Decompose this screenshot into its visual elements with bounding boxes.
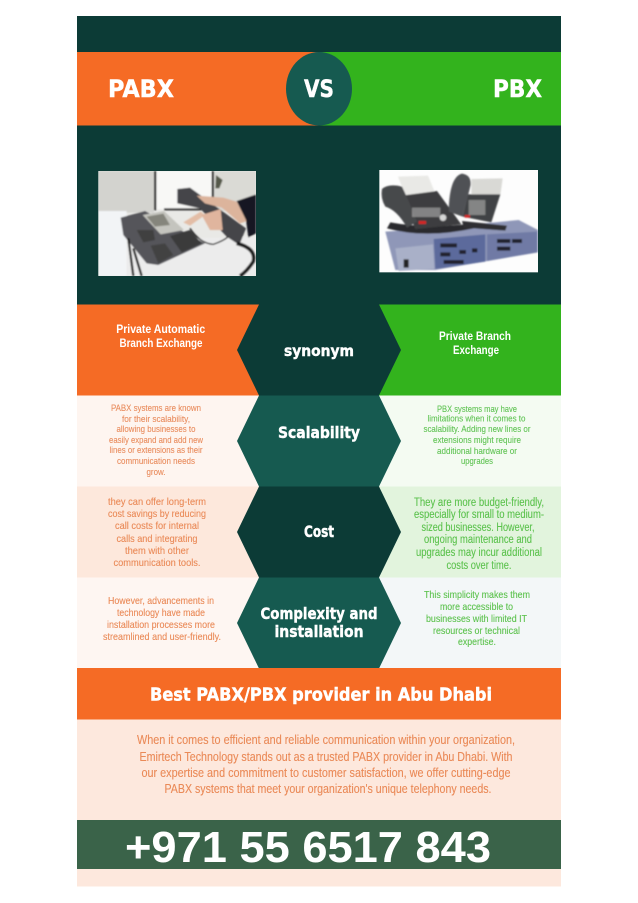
- PBX scalability text: additional hardware or: [437, 446, 517, 457]
- PABX cost text: they can offer long-term: [108, 496, 206, 508]
- PBX scalability text: [424, 404, 530, 467]
- PBX scalability text: scalability. Adding new lines or: [424, 424, 530, 435]
- phone number band: [77, 820, 561, 872]
- left cell: PABX synonym: Private Automatic: [116, 322, 205, 336]
- PBX scalability text: upgrades: [461, 456, 493, 467]
- PABX scalability text: for their scalability,: [122, 414, 190, 425]
- PABX scalability text: communication needs: [117, 456, 195, 467]
- heading: PBX: PBX: [493, 75, 542, 103]
- phone number band: +971 55 6517 843: [125, 823, 491, 872]
- PBX cost text: upgrades may incur additional: [416, 547, 542, 559]
- banner: best provider: Best PABX/PBX provider in Abu Dhabi: [150, 686, 492, 706]
- comparison banner: PABX vs PBX: [77, 52, 561, 126]
- PABX scalability text: [109, 403, 203, 478]
- hexagon: cost: Cost: [304, 522, 334, 541]
- PBX complexity text: more accessible to: [440, 601, 513, 613]
- hexagon: synonym: [237, 304, 401, 396]
- row: cost backgrounds and text: [77, 486, 561, 578]
- photo: hand holding desk phone handset: [98, 171, 256, 276]
- PABX complexity text: However, advancements in: [108, 595, 214, 607]
- PABX scalability text: easily expand and add new: [109, 435, 203, 446]
- right cell: PBX synonym: [319, 304, 561, 396]
- banner: best provider: [77, 668, 561, 720]
- PBX complexity text: resources or technical: [433, 625, 520, 637]
- PABX cost text: calls and integrating: [116, 533, 198, 545]
- PBX cost text: ongoing maintenance and: [424, 534, 532, 546]
- row: synonym: [77, 304, 561, 396]
- provider paragraph: our expertise and commitment to customer satisfaction, we offer cutting-edge: [142, 766, 511, 780]
- PABX cost text: cost savings by reducing: [108, 508, 206, 520]
- hexagon: synonym: synonym: [284, 342, 354, 360]
- left cell: PABX synonym: [77, 304, 319, 396]
- PABX complexity text: [103, 595, 221, 643]
- PBX cost text: costs over time.: [446, 560, 512, 572]
- row: scalability backgrounds and text: [77, 396, 561, 486]
- photo: PBX phones on server unit: [379, 170, 538, 272]
- PBX complexity text: expertise.: [458, 636, 496, 648]
- PBX cost text: sized businesses. However,: [422, 522, 534, 534]
- PBX scalability text: limitations when it comes to: [428, 414, 526, 424]
- hexagon: complexity and installation: [237, 578, 401, 668]
- vs badge: VS: [304, 75, 334, 103]
- PBX scalability text: PBX systems may have: [437, 404, 517, 415]
- PABX cost text: call costs for internal: [115, 520, 199, 532]
- hexagon: scalability: Scalability: [278, 423, 360, 442]
- PBX cost text: [414, 497, 544, 572]
- PABX cost text: them with other: [125, 545, 189, 557]
- PBX complexity text: This simplicity makes them: [424, 589, 530, 601]
- vs badge: [286, 52, 352, 126]
- row: complexity backgrounds and text: [77, 578, 561, 668]
- provider paragraph: [137, 733, 515, 796]
- PABX scalability text: allowing businesses to: [116, 424, 196, 435]
- hexagon: complexity and installation: Complexity and: [260, 604, 378, 623]
- panel: provider description: [77, 720, 561, 886]
- provider paragraph: When it comes to efficient and reliable communication within your organization,: [137, 733, 515, 747]
- PBX complexity text: businesses with limited IT: [426, 613, 527, 625]
- PABX complexity text: technology have made: [117, 607, 205, 619]
- right cell: PBX synonym: Private Branch: [439, 329, 511, 343]
- left cell: PABX synonym: Branch Exchange: [120, 336, 203, 350]
- PABX cost text: communication tools.: [114, 557, 200, 569]
- right cell: PBX synonym: Exchange: [453, 343, 499, 357]
- PABX scalability text: PABX systems are known: [111, 403, 201, 414]
- panel: dark header background: [77, 16, 561, 305]
- PABX complexity text: installation processes more: [107, 619, 215, 631]
- hexagon: cost: [237, 486, 401, 578]
- heading: PABX: PABX: [108, 75, 174, 103]
- PBX cost text: They are more budget-friendly,: [414, 497, 544, 509]
- provider paragraph: Emirtech Technology stands out as a trusted PABX provider in Abu Dhabi. With: [140, 750, 513, 764]
- PBX scalability text: extensions might require: [433, 435, 521, 446]
- hexagon: complexity and installation: installation: [274, 622, 364, 641]
- PABX scalability text: grow.: [146, 467, 166, 478]
- provider paragraph: PABX systems that meet your organization's unique telephony needs.: [164, 782, 492, 796]
- PBX cost text: especially for small to medium-: [414, 509, 544, 521]
- PABX scalability text: lines or extensions as their: [110, 445, 202, 456]
- PBX complexity text: [424, 589, 530, 648]
- PABX cost text: [108, 496, 206, 569]
- hexagon: scalability: [237, 396, 401, 486]
- PABX complexity text: streamlined and user-friendly.: [103, 631, 221, 643]
